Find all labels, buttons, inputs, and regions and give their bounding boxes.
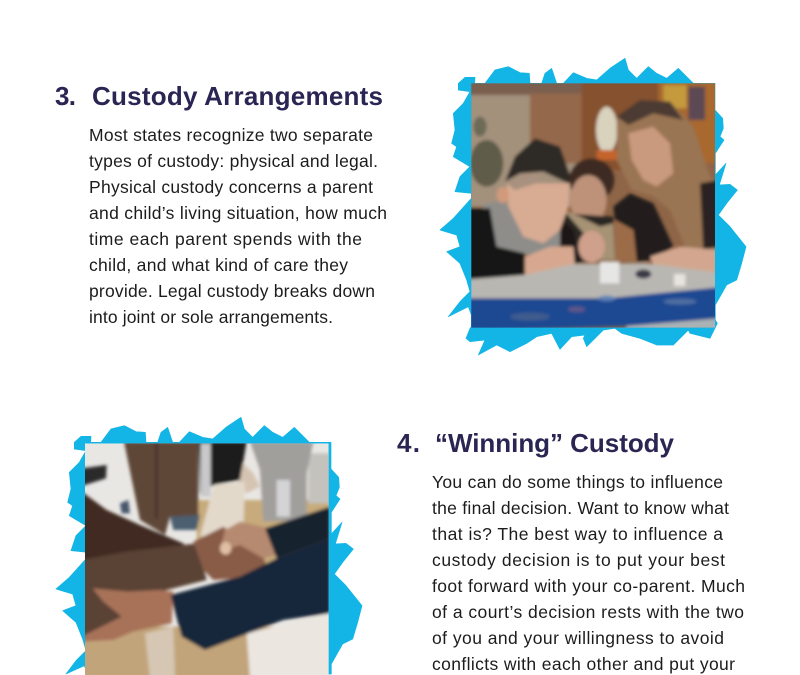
text block: custody types: into joint or sole arrangements. bbox=[89, 307, 333, 327]
text block: influencing the decision: custody decision is to put your best bbox=[432, 550, 725, 570]
woman face bbox=[628, 127, 673, 187]
text block: custody types: and child’s living situation, how much bbox=[89, 203, 387, 223]
navy arm bbox=[171, 538, 330, 650]
icon: blue paint splash bbox=[440, 58, 746, 355]
brown coat bbox=[124, 442, 198, 535]
upper navy sleeve bbox=[265, 507, 330, 558]
woman forearm and hand bbox=[650, 247, 718, 277]
text block: influencing the decision: that is? The best way to influence a bbox=[432, 524, 723, 544]
white lower right bbox=[247, 613, 330, 675]
boy sleeves bbox=[468, 208, 525, 279]
lower hand bbox=[82, 588, 173, 642]
icon: blue paint splash behind lower photo bbox=[56, 417, 362, 674]
boy shirt bbox=[482, 200, 560, 255]
man bbox=[569, 158, 614, 202]
text block: influencing the decision: You can do some things to influence bbox=[432, 472, 723, 492]
text block: custody types: types of custody: physical and legal. bbox=[89, 151, 378, 171]
text block: custody types: Most states recognize two separate bbox=[89, 125, 373, 145]
photo: clasped hands bbox=[82, 442, 332, 675]
clasped hands bbox=[193, 527, 267, 580]
text block: custody types: Physical custody concerns a parent bbox=[89, 177, 373, 197]
text block: influencing the decision: the final decision. Want to know what bbox=[432, 498, 729, 518]
heading: 4. "Winning" Custody: 4. bbox=[397, 428, 420, 458]
text block: custody types: child, and what kind of care they bbox=[89, 255, 348, 275]
table bbox=[468, 263, 718, 298]
grey person bbox=[250, 442, 313, 522]
brown sleeves bbox=[85, 491, 186, 562]
heading: 3. Custody Arrangements: Custody Arrangements bbox=[92, 81, 383, 111]
blue mat bbox=[468, 287, 718, 331]
heading: 4. "Winning" Custody: “Winning” Custody bbox=[435, 428, 675, 458]
text block: custody types: time each parent spends with the bbox=[89, 229, 362, 249]
text block: influencing the decision: of a court’s decision rests with the two bbox=[432, 602, 744, 622]
image: family at table with blue brush splash bbox=[440, 58, 746, 355]
photo: boy, man and woman at a table bbox=[468, 80, 718, 332]
heading: 3. Custody Arrangements: 3. bbox=[55, 81, 76, 111]
text block: influencing the decision: of you and your willingness to avoid bbox=[432, 628, 724, 648]
text block: custody types bbox=[89, 125, 387, 327]
chair and blue object bbox=[82, 465, 107, 486]
text block: custody types: provide. Legal custody breaks down bbox=[89, 281, 375, 301]
woman hair bbox=[617, 100, 718, 252]
woman top bbox=[613, 193, 673, 262]
boy hands bbox=[525, 247, 575, 275]
text block: influencing the decision: conflicts with each other and put your bbox=[432, 654, 735, 674]
boy head bbox=[507, 183, 570, 243]
cream lower leg bbox=[145, 627, 175, 675]
text block: influencing the decision: foot forward with your co-parent. Much bbox=[432, 576, 745, 596]
black top and cream trousers bbox=[198, 442, 247, 493]
text block: influencing the decision bbox=[432, 472, 745, 674]
